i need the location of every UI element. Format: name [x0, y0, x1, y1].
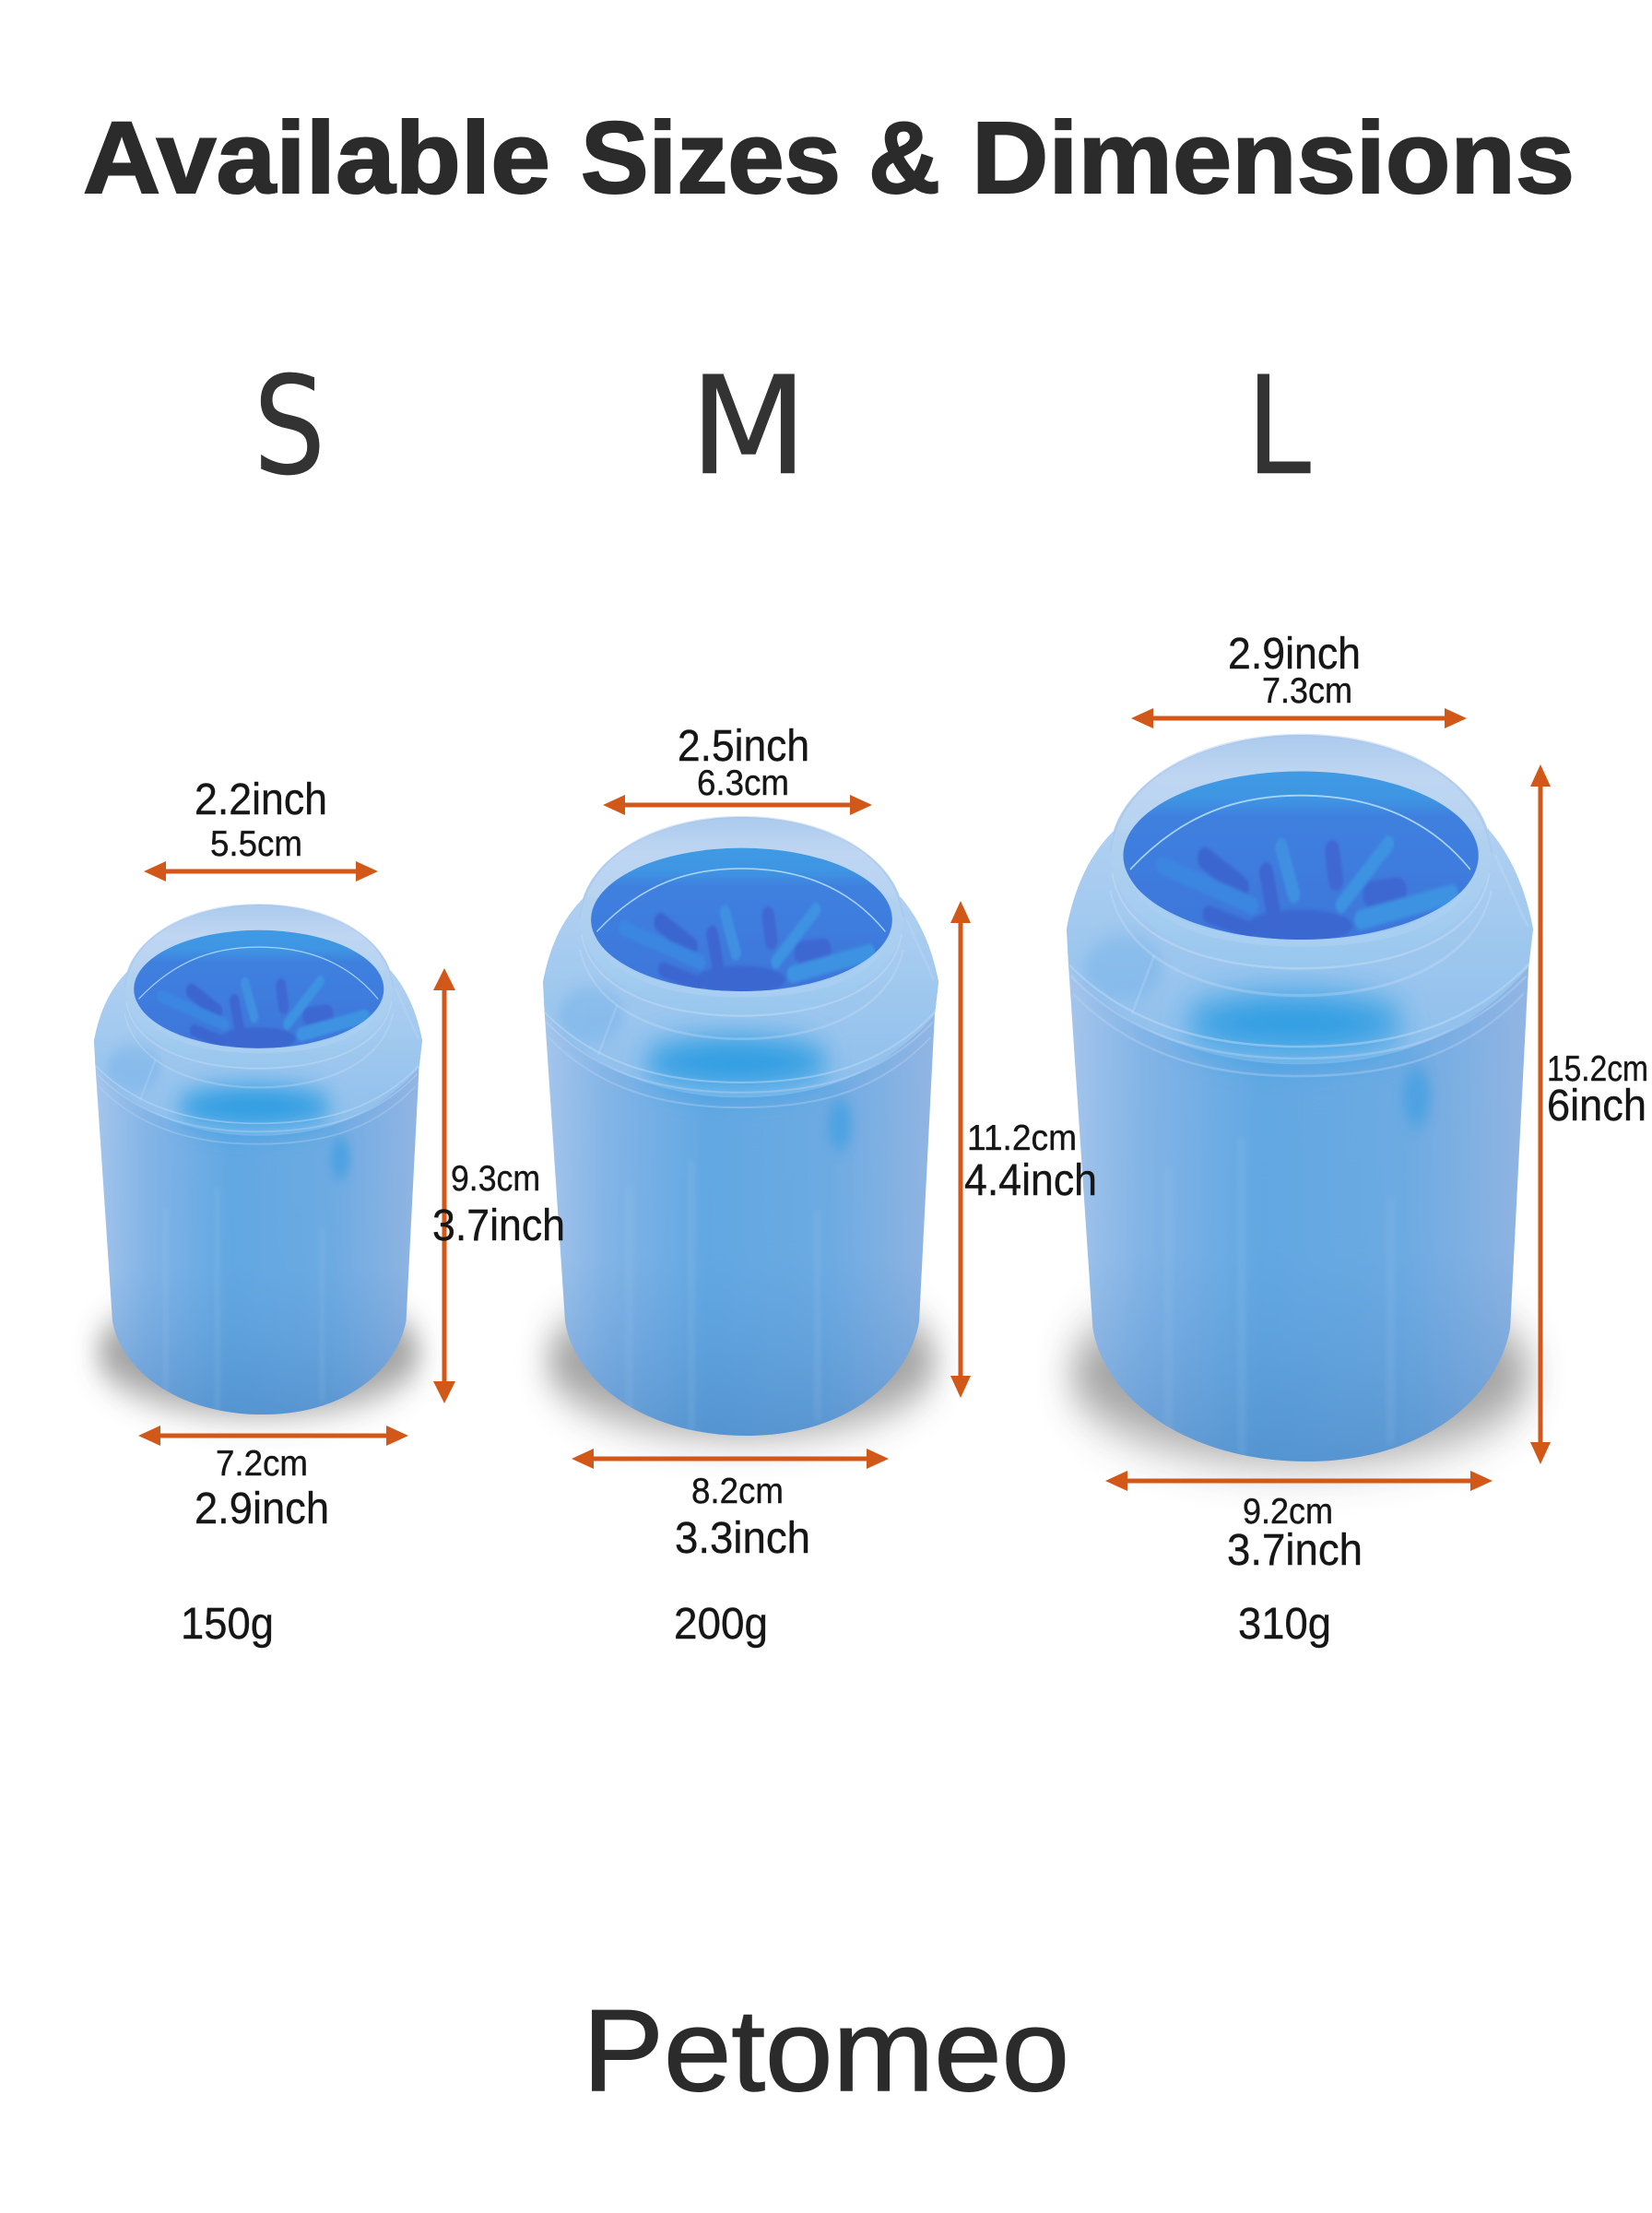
label: large weight: 310g: [1238, 1600, 1331, 1649]
label: small base cm: 7.2cm: [216, 1444, 308, 1484]
title: Dimensions: [972, 101, 1575, 215]
panel: large cup dimensions: [1105, 630, 1648, 1649]
label: medium top cm: 6.3cm: [697, 763, 789, 803]
arrow: medium top diameter: [603, 795, 872, 815]
product image: medium cup: [541, 817, 940, 1436]
label: medium weight: 200g: [674, 1600, 768, 1649]
arrow: large top diameter: [1131, 708, 1467, 728]
label: large top inches: 2.9inch: [1228, 630, 1361, 679]
panel: medium cup dimensions: [572, 722, 1097, 1649]
panel: small cup dimensions: [138, 775, 565, 1649]
label: small height cm: 9.3cm: [451, 1159, 540, 1199]
title: Sizes: [581, 101, 841, 215]
label: large height inches: 6inch: [1547, 1082, 1646, 1130]
label: large base inches: 3.7inch: [1227, 1526, 1363, 1575]
arrow: small base diameter: [138, 1426, 408, 1446]
label: medium height inches: 4.4inch: [964, 1156, 1097, 1205]
size heading L: L: [1246, 348, 1311, 505]
label: small height inches: 3.7inch: [432, 1201, 565, 1250]
title: Available: [83, 101, 550, 215]
arrow: large base diameter: [1105, 1471, 1493, 1491]
size heading S: S: [254, 348, 325, 505]
arrow: large height: [1530, 764, 1551, 1464]
label: medium base inches: 3.3inch: [675, 1514, 810, 1563]
label: large base cm: 9.2cm: [1243, 1492, 1333, 1532]
title: &: [868, 101, 940, 215]
label: small top inches: 2.2inch: [195, 775, 327, 824]
label: large top cm: 7.3cm: [1262, 671, 1352, 711]
label: medium height cm: 11.2cm: [967, 1118, 1077, 1158]
arrow: small top diameter: [144, 861, 378, 882]
arrow: medium height: [950, 901, 971, 1398]
title: [83, 101, 1575, 215]
label: small base inches: 2.9inch: [195, 1485, 329, 1533]
label: small top cm: 5.5cm: [210, 824, 302, 864]
brand name: Petomeo: [583, 1985, 1069, 2115]
label: medium base cm: 8.2cm: [691, 1472, 784, 1511]
size heading M: M: [690, 348, 808, 505]
product image: small cup: [92, 905, 424, 1414]
label: medium top inches: 2.5inch: [678, 722, 809, 771]
arrow: medium base diameter: [572, 1449, 889, 1469]
arrow: small height: [433, 968, 455, 1403]
label: small weight: 150g: [181, 1600, 274, 1649]
product image: large cup: [1065, 735, 1535, 1462]
